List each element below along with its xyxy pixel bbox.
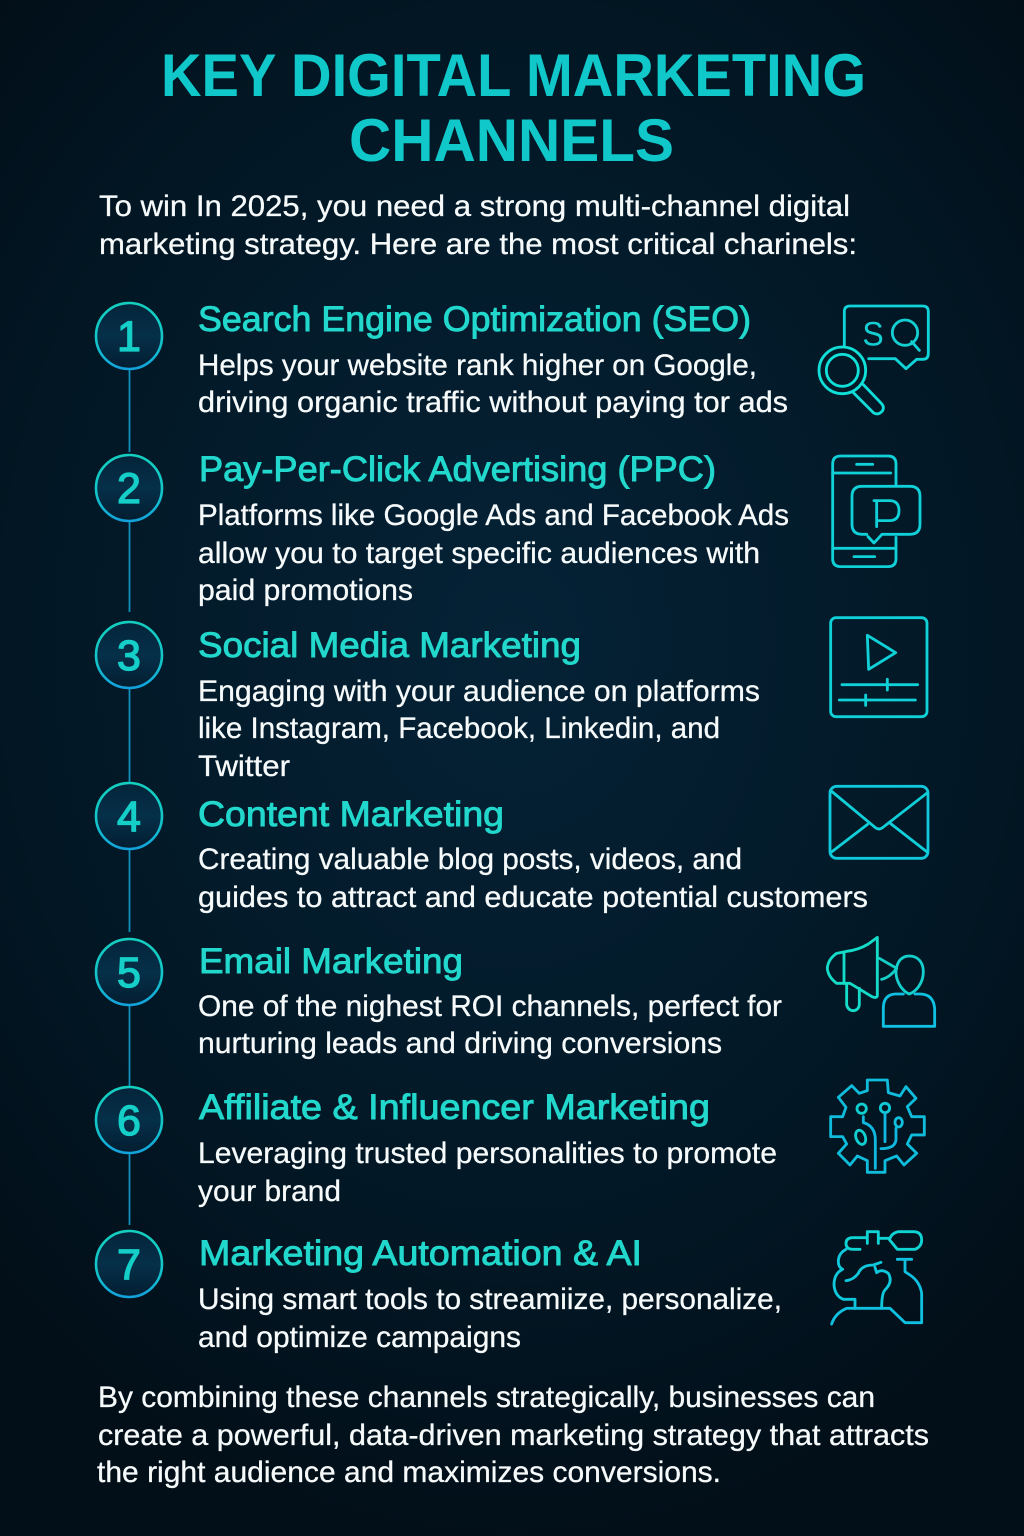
channel 5: email marketing [96, 939, 782, 1060]
number badge 1: 1 [117, 313, 141, 361]
heading 1: Search Engine Optimization (SEO) [198, 300, 751, 339]
heading 4: Content Marketing [198, 795, 504, 834]
number badge 2 [96, 455, 162, 521]
heading 6: Affiliate & Influencer Marketing [199, 1088, 710, 1127]
number badge 6 [96, 1087, 162, 1153]
channel 3: social media [96, 622, 760, 783]
number badge 5: 5 [117, 949, 141, 997]
heading 7: Marketing Automation & AI [199, 1234, 642, 1273]
description 4: Creating valuable blog posts, videos, and [198, 843, 742, 876]
number badge 7: 7 [117, 1241, 141, 1289]
title: CHANNELS [349, 107, 674, 174]
description 7 [198, 1283, 782, 1354]
intro text: To win In 2025, you need a strong multi-channel digital [99, 190, 850, 223]
description 3: Engaging with your audience on platforms [198, 675, 760, 708]
description 6: your brand [198, 1175, 341, 1208]
channel 1: SEO [96, 300, 788, 419]
icon: phone with p bubble [833, 456, 920, 567]
closing text: the right audience and maximizes conversions. [97, 1456, 721, 1489]
description 5: One of the nighest ROI channels, perfect for [198, 990, 782, 1023]
description 2: allow you to target specific audiences with [198, 537, 760, 570]
description 2: paid promotions [198, 574, 413, 607]
heading 5: Email Marketing [199, 942, 463, 981]
description 6: Leveraging trusted personalities to promote [198, 1137, 777, 1170]
closing text: By combining these channels strategically, businesses can [98, 1381, 875, 1414]
number badge 1 [96, 303, 162, 369]
icon: megaphone and person [827, 937, 935, 1026]
channel 7: automation and AI [96, 1231, 782, 1354]
description 2: Platforms like Google Ads and Facebook Ads [198, 499, 789, 532]
description 3: like Instagram, Facebook, Linkedin, and [198, 712, 720, 745]
description 5 [198, 990, 782, 1060]
description 3: Twitter [198, 750, 290, 783]
description 4 [198, 843, 868, 914]
description 4: guides to attract and educate potential customers [198, 881, 868, 914]
heading 3: Social Media Marketing [198, 626, 581, 665]
closing text: create a powerful, data-driven marketing strategy that attracts [98, 1419, 929, 1452]
icon: circuit gear [831, 1080, 924, 1172]
icon: head with automation tools [832, 1232, 922, 1324]
description 1: Helps your website rank higher on Google, [198, 349, 757, 382]
number badge 5 [96, 939, 162, 1005]
description 7: Using smart tools to streamiize, personalize, [198, 1283, 782, 1316]
number badge 6: 6 [117, 1097, 141, 1145]
intro text [99, 190, 857, 261]
number badge 4 [96, 783, 162, 849]
icon: search bubble: S [862, 315, 884, 353]
closing text [97, 1381, 929, 1489]
title [161, 42, 866, 174]
intro text: marketing strategy. Here are the most critical charinels: [99, 228, 857, 261]
number badge 4: 4 [117, 793, 141, 841]
heading 2: Pay-Per-Click Advertising (PPC) [199, 450, 716, 489]
description 5: nurturing leads and driving conversions [198, 1027, 722, 1060]
description 1: driving organic traffic without paying tor ads [198, 386, 788, 419]
title: KEY DIGITAL MARKETING [161, 42, 866, 109]
description 2 [198, 499, 789, 607]
icon: search bubble [819, 306, 928, 414]
description 3 [198, 675, 760, 783]
channel 6: affiliate and influencer [96, 1087, 777, 1208]
description 7: and optimize campaigns [198, 1321, 521, 1354]
description 6 [198, 1137, 777, 1208]
timeline connector lines [128, 369, 130, 1225]
channel 4: content marketing [96, 783, 868, 914]
number badge 7 [96, 1231, 162, 1297]
icon: video player [831, 618, 927, 717]
description 1 [198, 349, 788, 419]
number badge 3 [96, 622, 162, 688]
channel 2: PPC [96, 450, 789, 607]
icon: envelope [830, 786, 928, 858]
number badge 2: 2 [117, 465, 141, 513]
number badge 3: 3 [117, 632, 141, 680]
